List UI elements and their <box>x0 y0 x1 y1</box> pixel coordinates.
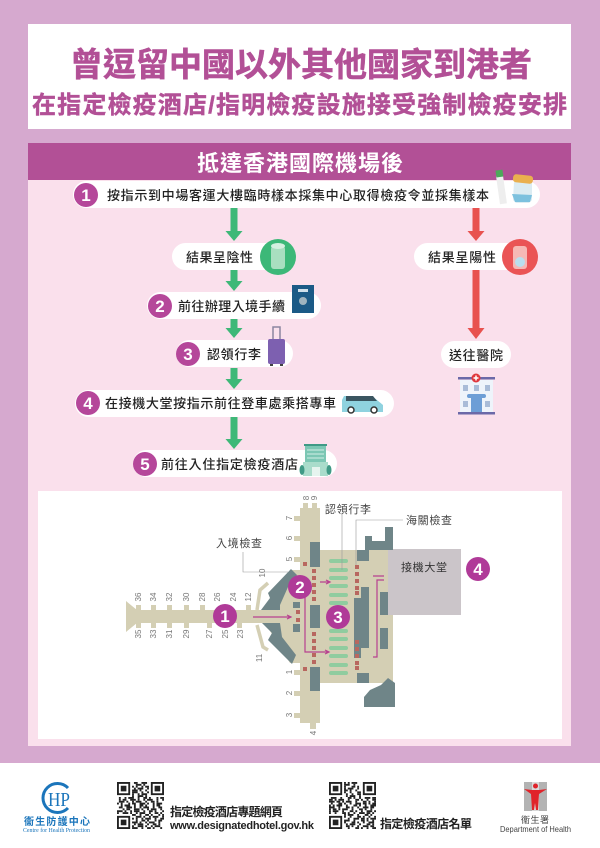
step 1 pill: 按指示到中場客運大樓臨時樣本採集中心取得檢疫令並採集樣本 <box>107 188 489 203</box>
arrivals hall: 接機大堂 <box>401 560 447 574</box>
step 4 pill: 在接機大堂按指示前往登車處乘搭專車 <box>105 396 336 411</box>
green arrow 4 <box>226 368 242 389</box>
step 5 pill <box>133 450 337 477</box>
logo: Centre for Health Protection <box>23 784 91 834</box>
footer band <box>0 763 600 848</box>
step 1 pill: 1 <box>81 186 91 205</box>
dark wedges and blocks <box>261 527 395 707</box>
icon: passport <box>292 285 314 313</box>
gate numbers: 33 <box>149 629 158 638</box>
gate numbers: 24 <box>229 592 238 601</box>
gate numbers: 7 <box>285 515 294 520</box>
map labels <box>216 502 452 550</box>
website caption: www.designatedhotel.gov.hk <box>169 820 315 832</box>
map number markers: 1 <box>220 607 230 626</box>
map number markers: 3 <box>333 608 343 627</box>
section heading bar: 抵達香港國際機場後 <box>197 151 403 176</box>
gate numbers: 28 <box>198 592 207 601</box>
gate numbers: 36 <box>134 592 143 601</box>
step 4 pill: 4 <box>83 394 93 413</box>
gate numbers: 6 <box>285 535 294 540</box>
logo: Centre for Health Protection: HP <box>48 789 70 811</box>
baggage carousels <box>329 559 348 675</box>
positive result pill <box>414 239 538 275</box>
leader lines <box>243 514 403 572</box>
green arrow 5 <box>226 417 242 449</box>
gate numbers: 11 <box>255 653 264 662</box>
route lines <box>253 576 384 657</box>
QR code: hotel website <box>117 782 164 829</box>
gate numbers: 29 <box>182 629 191 638</box>
immigration and customs points <box>296 562 359 671</box>
website caption <box>169 804 315 832</box>
icon: hotel <box>300 444 332 476</box>
gate numbers: 12 <box>244 592 253 601</box>
gate numbers: 8 <box>302 495 311 500</box>
map number markers: 4 <box>473 560 483 579</box>
step 2 pill <box>147 292 321 319</box>
gate numbers: 5 <box>285 556 294 561</box>
logo: Department of Health: 衞生署 <box>521 814 549 825</box>
website caption: 指定檢疫酒店專題網頁 <box>170 804 283 819</box>
map labels: 入境檢查 <box>216 536 262 550</box>
gate numbers: 31 <box>165 629 174 638</box>
gate numbers: 3 <box>285 712 294 717</box>
icon: sample tube and bottle <box>495 170 533 204</box>
hotel list caption: 指定檢疫酒店名單 <box>380 816 472 831</box>
step 1 pill <box>73 181 540 208</box>
step 2 pill: 前往辦理入境手續 <box>178 299 285 314</box>
gate numbers: 23 <box>236 629 245 638</box>
gate numbers: 4 <box>309 730 318 735</box>
gate numbers: 34 <box>149 592 158 601</box>
title panel <box>28 24 571 129</box>
gate numbers: 1 <box>285 669 294 674</box>
logo: Department of Health: Department of Health <box>500 824 571 834</box>
step 4 pill <box>75 390 394 417</box>
negative result pill: 結果呈陰性 <box>186 250 253 265</box>
section heading bar <box>28 143 571 180</box>
step 2 pill: 2 <box>155 297 165 316</box>
gate numbers: 10 <box>258 568 267 577</box>
green arrow 2 <box>226 270 242 291</box>
logo: Centre for Health Protection: 衞生防護中心 <box>24 815 90 828</box>
icon: suitcase <box>268 327 285 366</box>
negative result pill <box>172 239 296 275</box>
step 3 pill: 3 <box>183 345 193 364</box>
gate numbers <box>134 495 319 735</box>
green arrow 1 <box>226 208 242 241</box>
step 5 pill: 前往入住指定檢疫酒店 <box>161 457 298 472</box>
map number markers: 2 <box>295 578 305 597</box>
map number markers <box>213 557 490 629</box>
icon: hospital <box>458 374 495 414</box>
step 3 pill <box>176 340 293 367</box>
logo: Department of Health <box>500 782 571 834</box>
panel: flow background <box>28 180 571 746</box>
gate numbers: 2 <box>285 690 294 695</box>
step 5 pill: 5 <box>140 455 150 474</box>
panel: airport map <box>38 491 562 739</box>
positive result pill: 結果呈陽性 <box>428 250 496 265</box>
west pier <box>126 601 267 632</box>
title line 2: 在指定檢疫酒店/指明檢疫設施接受強制檢疫安排 <box>32 91 567 119</box>
map labels: 海關檢查 <box>406 513 452 527</box>
red arrow 1 <box>468 208 484 241</box>
map labels: 認領行李 <box>325 502 371 516</box>
gate numbers: 26 <box>213 592 222 601</box>
main building body <box>265 503 393 729</box>
gate numbers: 9 <box>310 495 319 500</box>
gate numbers: 27 <box>205 629 214 638</box>
gate numbers: 32 <box>165 592 174 601</box>
QR code: hotel list <box>329 782 376 829</box>
send to hospital pill <box>441 341 511 368</box>
icon: bus <box>342 396 383 413</box>
green arrow 3 <box>226 319 242 338</box>
gate numbers: 25 <box>221 629 230 638</box>
logo: Centre for Health Protection: Centre for Health Protection <box>23 827 91 834</box>
satellite arms <box>257 583 268 650</box>
gate numbers: 35 <box>134 629 143 638</box>
red arrow 2 <box>468 270 484 339</box>
gate numbers: 30 <box>182 592 191 601</box>
step 3 pill: 認領行李 <box>207 347 261 362</box>
arrivals hall <box>388 549 461 615</box>
send to hospital pill: 送往醫院 <box>449 348 503 363</box>
title line 1: 曾逗留中國以外其他國家到港者 <box>70 46 532 83</box>
